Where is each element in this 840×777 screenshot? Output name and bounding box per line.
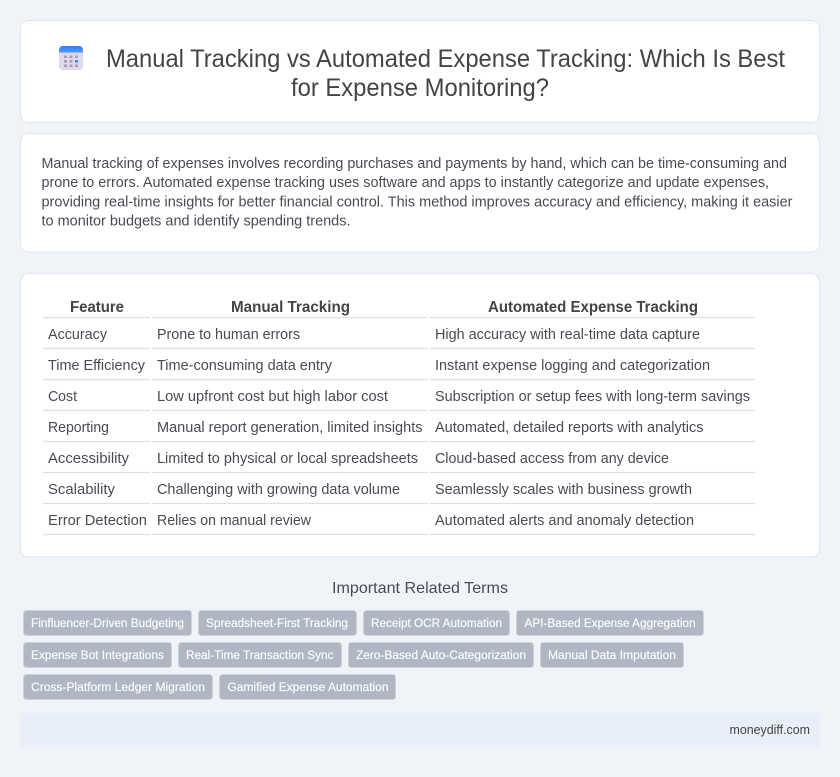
tag <box>516 610 704 636</box>
footer bar <box>20 713 820 747</box>
table row: time efficiency: Time Efficiency <box>48 358 146 374</box>
table row: accuracy: High accuracy with real-time data capture <box>435 327 700 343</box>
panel: title header <box>20 20 820 122</box>
tag <box>24 642 172 668</box>
tag: Expense Bot Integrations <box>31 648 164 662</box>
table row: error detection: Relies on manual review <box>157 513 312 529</box>
table row: time efficiency: Instant expense logging and categorization <box>435 358 710 374</box>
panel: related term tags <box>24 610 704 700</box>
table row: scalability: Scalability <box>48 482 116 498</box>
table row: accuracy <box>48 327 700 343</box>
table row: cost: Low upfront cost but high labor cost <box>157 389 388 405</box>
tag: API-Based Expense Aggregation <box>524 616 696 630</box>
table row: time efficiency: Time-consuming data entry <box>157 358 333 374</box>
table row: reporting: Automated, detailed reports with analytics <box>435 420 704 436</box>
table row: scalability: Challenging with growing data volume <box>157 482 400 498</box>
tag <box>348 642 534 668</box>
tag: Gamified Expense Automation <box>228 680 389 694</box>
tag: Spreadsheet-First Tracking <box>206 616 348 630</box>
tag <box>24 674 212 700</box>
table row: accessibility <box>48 451 669 467</box>
title: Manual Tracking vs Automated Expense Tracking: Which Is Best <box>106 45 785 73</box>
title: for Expense Monitoring? <box>291 74 549 102</box>
text block: description paragraph: prone to errors. Automated expense tracking uses software and apps to instantly categorize and update expenses, <box>42 175 769 191</box>
tag <box>24 610 192 636</box>
table row: accessibility: Limited to physical or local spreadsheets <box>157 451 418 467</box>
tag <box>364 610 510 636</box>
table header row: Feature <box>70 299 124 316</box>
tag <box>220 674 396 700</box>
heading: related terms: Important Related Terms <box>332 580 508 597</box>
table row: cost: Cost <box>48 389 77 405</box>
text block: description paragraph <box>42 156 793 230</box>
table row: reporting: Manual report generation, limited insights <box>157 420 422 436</box>
tag: Zero-Based Auto-Categorization <box>356 648 526 662</box>
tag: Manual Data Imputation <box>548 648 676 662</box>
table row: error detection: Error Detection <box>48 513 147 529</box>
table header row <box>70 299 698 316</box>
table row: accessibility: Cloud-based access from any device <box>435 451 669 467</box>
text block: description paragraph: providing real-time insights for better financial control. This method improves accuracy and efficiency, making it easier <box>42 194 793 210</box>
text block: description paragraph: to monitor budgets and identify spending trends. <box>42 214 350 230</box>
table row: reporting: Reporting <box>48 420 109 436</box>
table row: accuracy: Accuracy <box>48 327 108 343</box>
table row: accuracy: Prone to human errors <box>157 327 300 343</box>
table row: cost <box>48 389 750 405</box>
tag <box>198 610 356 636</box>
table row: error detection: Automated alerts and anomaly detection <box>435 513 694 529</box>
panel: comparison table <box>20 274 820 557</box>
table row: time efficiency <box>48 358 710 374</box>
table header row: Automated Expense Tracking <box>488 299 698 316</box>
tag <box>178 642 342 668</box>
table row: scalability: Seamlessly scales with business growth <box>435 482 692 498</box>
panel: description <box>20 134 820 252</box>
table row: scalability <box>48 482 692 498</box>
tag: Real-Time Transaction Sync <box>186 648 334 662</box>
table row: reporting <box>48 420 704 436</box>
tag: Finfluencer-Driven Budgeting <box>31 616 184 630</box>
tag <box>540 642 684 668</box>
table header row: Manual Tracking <box>231 299 350 316</box>
text block: description paragraph: Manual tracking of expenses involves recording purchases and payments by hand, which can be time-consuming and <box>42 156 787 172</box>
title <box>106 45 785 102</box>
table row: cost: Subscription or setup fees with long-term savings <box>435 389 750 405</box>
table row: error detection <box>48 513 694 529</box>
footer source: moneydiff.com <box>730 723 810 737</box>
tag: Cross-Platform Ledger Migration <box>31 680 205 694</box>
icon: calendar <box>59 46 83 70</box>
table rules <box>43 318 755 534</box>
table row: accessibility: Accessibility <box>48 451 130 467</box>
tag: Receipt OCR Automation <box>371 616 502 630</box>
